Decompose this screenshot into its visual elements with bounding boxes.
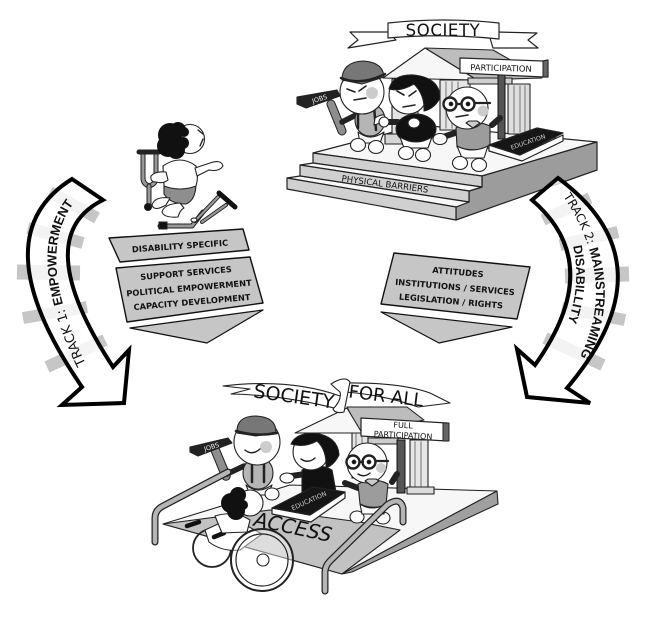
top scene: society with physical barriers — [287, 20, 597, 220]
ramp — [163, 485, 498, 574]
panel: disability specific — [109, 229, 249, 262]
sign: full participation: PARTICIPATION — [374, 429, 433, 442]
head and hair — [176, 124, 204, 154]
arrow outline — [517, 178, 618, 403]
book: education: EDUCATION — [510, 133, 547, 152]
panel: support services — [116, 257, 263, 322]
book: education: EDUCATION — [290, 490, 328, 512]
sign: full participation — [361, 418, 449, 493]
panel: support services: CAPACITY DEVELOPMENT — [133, 292, 251, 312]
person: worker with hammer: JOBS — [202, 441, 220, 454]
arrowhead: left panel down — [130, 310, 263, 343]
label: physical barriers: PHYSICAL BARRIERS — [341, 174, 429, 196]
person: worker with hammer: JOBS — [310, 93, 328, 106]
track 1 arrow: empowerment — [16, 176, 132, 408]
panel: attitudes, institutions, legislation — [381, 253, 530, 319]
banner: society for all: FOR ALL — [347, 381, 425, 411]
arrow label: TRACK 1: EMPOWERMENT — [47, 198, 84, 368]
panel: support services: SUPPORT SERVICES — [140, 264, 232, 282]
left crutch figure — [139, 122, 235, 229]
arrow label: TRACK 2: MAINSTREAMING — [564, 191, 605, 359]
sign: participation: PARTICIPATION — [470, 62, 532, 74]
arrowhead: right panel down — [381, 312, 512, 343]
temple — [383, 48, 542, 144]
panel: support services: POLITICAL EMPOWERMENT — [126, 278, 252, 298]
sign: full participation: FULL — [393, 420, 413, 431]
banner: society for all: SOCIETY — [252, 380, 336, 414]
left handrail — [155, 472, 228, 542]
panel: disability specific: DISABILITY SPECIFIC — [132, 238, 228, 254]
radial bars behind arrow — [543, 198, 629, 365]
fallen crutch — [159, 193, 235, 229]
person: boy with glasses — [345, 443, 397, 524]
book: education — [272, 487, 345, 522]
bottom scene: society for all — [155, 379, 498, 591]
legs — [152, 198, 170, 208]
shorts — [164, 183, 196, 204]
right handrail — [325, 501, 403, 591]
book: education — [489, 128, 563, 161]
access label: ACCESS — [250, 507, 334, 547]
track 2 arrow: mainstreaming disability — [514, 176, 630, 405]
panel: attitudes, institutions, legislation: ATTITUDES — [432, 265, 484, 279]
platform and steps — [287, 125, 597, 220]
panel: attitudes, institutions, legislation: INSTITUTIONS / SERVICES — [395, 277, 515, 297]
person: worker with hammer — [297, 61, 385, 154]
arrow outline — [28, 179, 129, 405]
banner: society for all — [223, 379, 450, 414]
person: boy with glasses — [433, 87, 500, 172]
banner: society — [348, 20, 538, 48]
temple — [295, 407, 434, 494]
person: worker with hammer — [190, 416, 280, 500]
person: girl — [379, 75, 440, 162]
panel: attitudes, institutions, legislation: LEGISLATION / RIGHTS — [399, 291, 503, 311]
torso and arms — [163, 160, 198, 189]
standing crutch — [139, 152, 159, 210]
arrow label: DISABILLITY — [568, 245, 585, 324]
sign: participation — [460, 58, 548, 139]
banner: society: SOCIETY — [406, 21, 481, 40]
radial bars behind arrow — [17, 192, 105, 367]
person in wheelchair — [187, 487, 293, 591]
person: girl — [280, 433, 339, 492]
